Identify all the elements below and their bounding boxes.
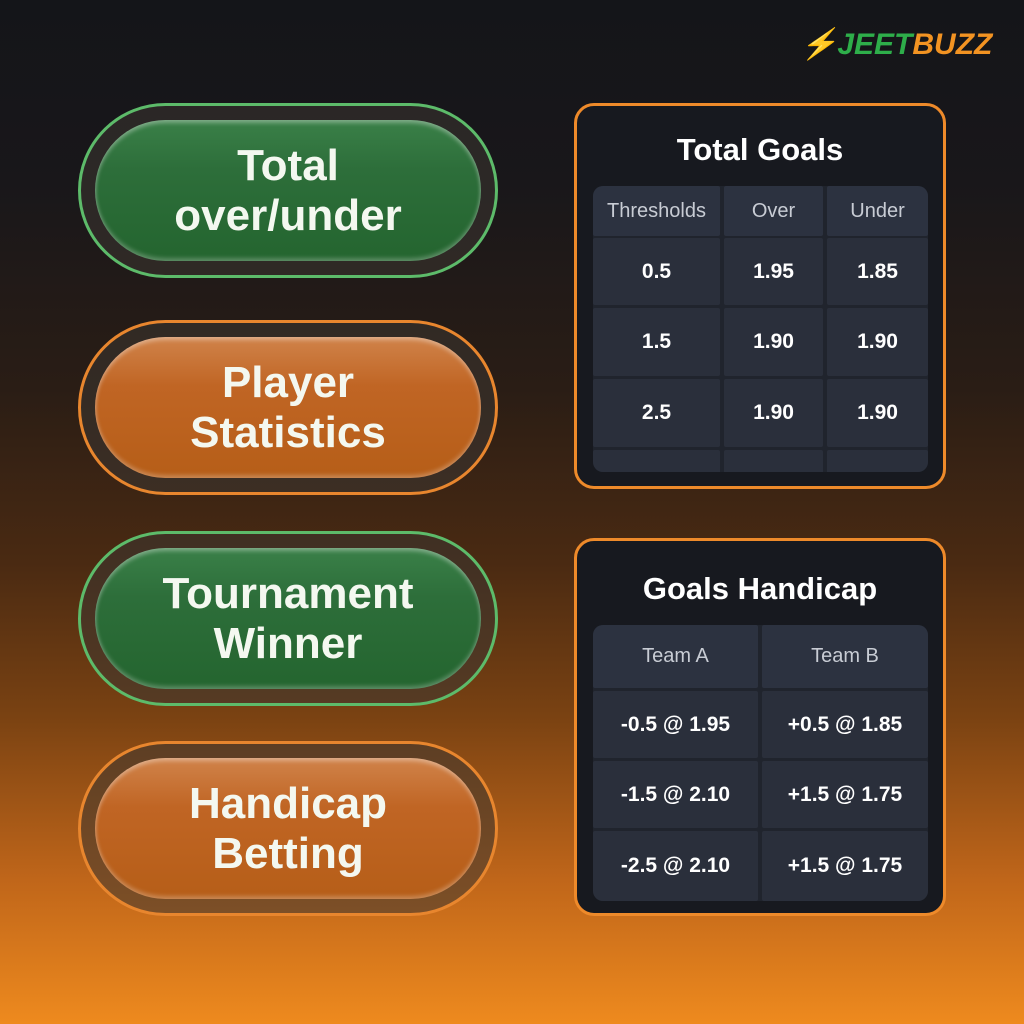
table: Team A <box>642 645 709 667</box>
pill: Handicap Betting: Betting <box>212 828 364 878</box>
table: 2.5 <box>642 401 671 424</box>
pill: Player Statistics: Player <box>222 358 354 406</box>
panel: Total Goals <box>574 103 946 489</box>
pill: Tournament Winner: Tournament <box>163 568 413 618</box>
pill: Total over/under: Total <box>237 140 339 190</box>
table: -2.5 @ 2.10 <box>621 854 730 877</box>
table: 1.5 <box>642 330 671 353</box>
pill: Player Statistics <box>78 320 498 495</box>
pill: Tournament Winner: Winner <box>214 618 362 668</box>
pill: Tournament Winner <box>78 531 498 706</box>
pill: Handicap Betting <box>78 741 498 916</box>
table <box>593 186 928 472</box>
table: 1.90 <box>857 401 898 424</box>
pill: Total over/under <box>78 103 498 278</box>
table: 1.90 <box>857 330 898 353</box>
table: Under <box>850 200 905 222</box>
pill: Handicap Betting: Handicap <box>189 778 387 828</box>
table: 0.5 <box>642 260 671 282</box>
table <box>593 625 928 901</box>
table: 1.95 <box>753 260 794 282</box>
table: -1.5 @ 2.10 <box>621 782 730 806</box>
table: -0.5 @ 1.95 <box>621 712 730 736</box>
table: Thresholds <box>607 200 706 222</box>
heading: Goals Handicap <box>643 571 877 606</box>
table: Over <box>752 200 795 222</box>
table: 1.85 <box>857 260 898 282</box>
logo: ⚡JEETBUZZ <box>800 28 992 61</box>
panel: Goals Handicap <box>574 538 946 916</box>
heading: Total Goals <box>677 132 843 167</box>
table: +0.5 @ 1.85 <box>788 712 902 736</box>
table: +1.5 @ 1.75 <box>788 782 902 806</box>
table: 1.90 <box>753 330 794 353</box>
table: +1.5 @ 1.75 <box>788 854 902 877</box>
pill: Total over/under: over/under <box>174 190 402 240</box>
table: 1.90 <box>753 401 794 424</box>
pill: Player Statistics: Statistics <box>190 408 386 456</box>
table: Team B <box>811 645 879 667</box>
